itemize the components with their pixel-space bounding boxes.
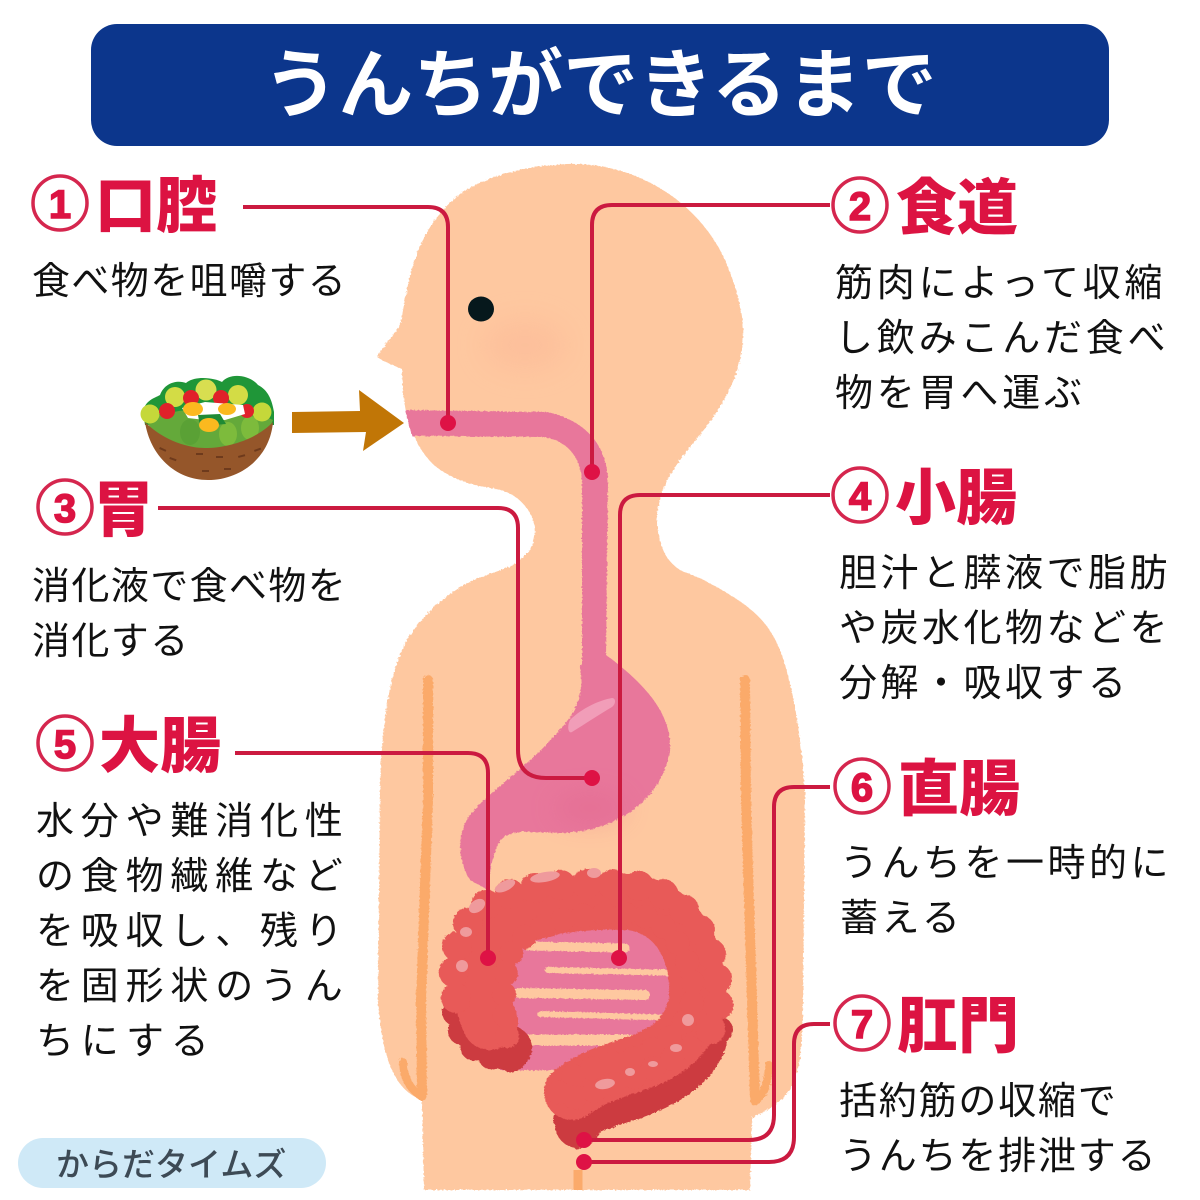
eye [468, 296, 494, 322]
section 1: oral cavity: 食べ物を咀嚼する [32, 261, 347, 303]
section 5: large intestine: を吸収し、残り [36, 911, 350, 953]
logo pill [18, 1138, 326, 1188]
section 5: large intestine: の食物繊維など [36, 856, 350, 898]
section 4: small intestine: 胆汁と膵液で脂肪 [839, 553, 1171, 595]
section 5: large intestine: 水分や難消化性 [36, 801, 350, 843]
section 1: oral cavity [32, 172, 347, 303]
cheek [483, 319, 567, 371]
logo pill: からだタイムズ [56, 1146, 286, 1183]
large intestine [454, 884, 719, 1100]
arrow: food to mouth [292, 390, 404, 451]
body silhouette [377, 164, 805, 1190]
section 4: small intestine: 小腸 [895, 464, 1017, 532]
arm line right [745, 680, 755, 1100]
stomach highlight [568, 698, 615, 732]
body illustration [377, 164, 805, 1190]
title banner [91, 24, 1109, 146]
section 3: stomach: 消化する [32, 621, 190, 663]
large intestine shadow [456, 1012, 720, 1142]
section 1: oral cavity: 1 [49, 183, 71, 227]
section 6: rectum: うんちを一時的に [840, 843, 1172, 885]
section 3: stomach: 3 [54, 487, 76, 531]
section 7: anus [835, 992, 1157, 1178]
section 2: esophagus: し飲みこんだ食べ [835, 318, 1169, 360]
section 2: esophagus: 2 [849, 185, 871, 229]
arm line left [421, 680, 428, 1095]
large intestine highlights [456, 868, 694, 1091]
stomach [460, 655, 670, 890]
section 4: small intestine: や炭水化物などを [839, 608, 1171, 650]
section 4: small intestine [833, 464, 1171, 705]
section 4: small intestine: 分解・吸収する [839, 663, 1130, 705]
section 2: esophagus [833, 174, 1169, 415]
section 5: large intestine: 5 [54, 723, 76, 767]
section 3: stomach [32, 476, 347, 663]
section 5: large intestine: 大腸 [99, 712, 221, 780]
small intestine [500, 917, 690, 1070]
title banner: うんちができるまで [263, 43, 937, 127]
section 7: anus: 括約筋の収縮で [839, 1081, 1118, 1123]
small intestine folds [518, 946, 684, 1040]
section 5: large intestine [36, 712, 350, 1063]
stomach shade [555, 796, 625, 820]
section 5: large intestine: を固形状のうん [36, 966, 350, 1008]
section 6: rectum: 6 [851, 766, 873, 810]
section 2: esophagus: 食道 [896, 174, 1018, 242]
section 6: rectum: 蓄える [840, 898, 963, 940]
callout lines [158, 205, 830, 1170]
section 1: oral cavity: 口腔 [95, 172, 217, 240]
section 3: stomach: 消化液で食べ物を [32, 566, 347, 608]
section 2: esophagus: 物を胃へ運ぶ [835, 373, 1086, 415]
section 4: small intestine: 4 [849, 475, 872, 519]
section 3: stomach: 胃 [93, 476, 154, 544]
esophagus [405, 410, 608, 670]
section 7: anus: うんちを排泄する [839, 1136, 1157, 1178]
navel line [574, 1170, 582, 1190]
section 7: anus: 肛門 [897, 992, 1019, 1060]
section 6: rectum [835, 755, 1172, 940]
section 7: anus: 7 [851, 1003, 873, 1047]
section 6: rectum: 直腸 [898, 755, 1020, 823]
section 2: esophagus: 筋肉によって収縮 [835, 263, 1166, 305]
section 5: large intestine: ちにする [36, 1021, 216, 1063]
icon: salad bowl [140, 376, 274, 480]
